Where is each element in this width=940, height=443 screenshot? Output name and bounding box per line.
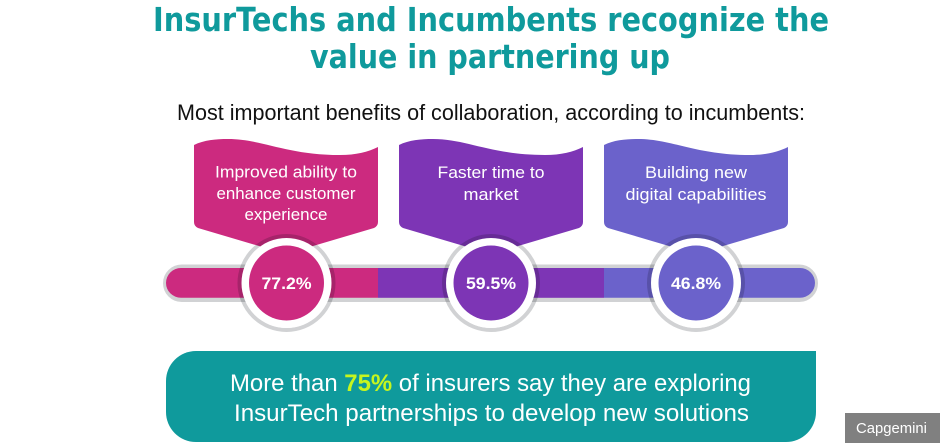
metric: 59.5% xyxy=(444,236,538,330)
panel: faster time to market: Faster time to xyxy=(438,163,544,182)
subtitle: Most important benefits of collaboration, according to incumbents: xyxy=(177,100,805,125)
panel: faster time to market xyxy=(399,139,583,254)
panel: improved customer experience: experience xyxy=(244,205,328,224)
metric: 46.8%: 46.8% xyxy=(671,274,721,293)
panel: building digital capabilities xyxy=(604,139,788,254)
panel: faster time to market: market xyxy=(464,185,519,204)
metric: 77.2% xyxy=(240,236,334,330)
callout: InsurTech partnerships to develop new solutions xyxy=(234,400,749,427)
metric: 77.2%: 77.2% xyxy=(262,274,312,293)
title: value in partnering up xyxy=(310,37,670,76)
panel: building digital capabilities: Building new xyxy=(645,163,748,182)
source badge: Capgemini xyxy=(856,421,927,437)
metric: 46.8% xyxy=(649,236,743,330)
callout xyxy=(166,351,816,442)
panel: improved customer experience: Improved ability to xyxy=(215,162,357,182)
panel: improved customer experience xyxy=(194,139,378,254)
title: InsurTechs and Incumbents recognize the xyxy=(153,0,829,39)
panel: building digital capabilities: digital capabilities xyxy=(626,185,766,204)
callout: More than 75% of insurers say they are exploring xyxy=(230,370,751,397)
title xyxy=(153,0,829,76)
panel: improved customer experience: enhance customer xyxy=(216,184,356,203)
source badge xyxy=(845,413,940,443)
metric: 59.5%: 59.5% xyxy=(466,274,516,293)
progress bar xyxy=(163,264,818,302)
